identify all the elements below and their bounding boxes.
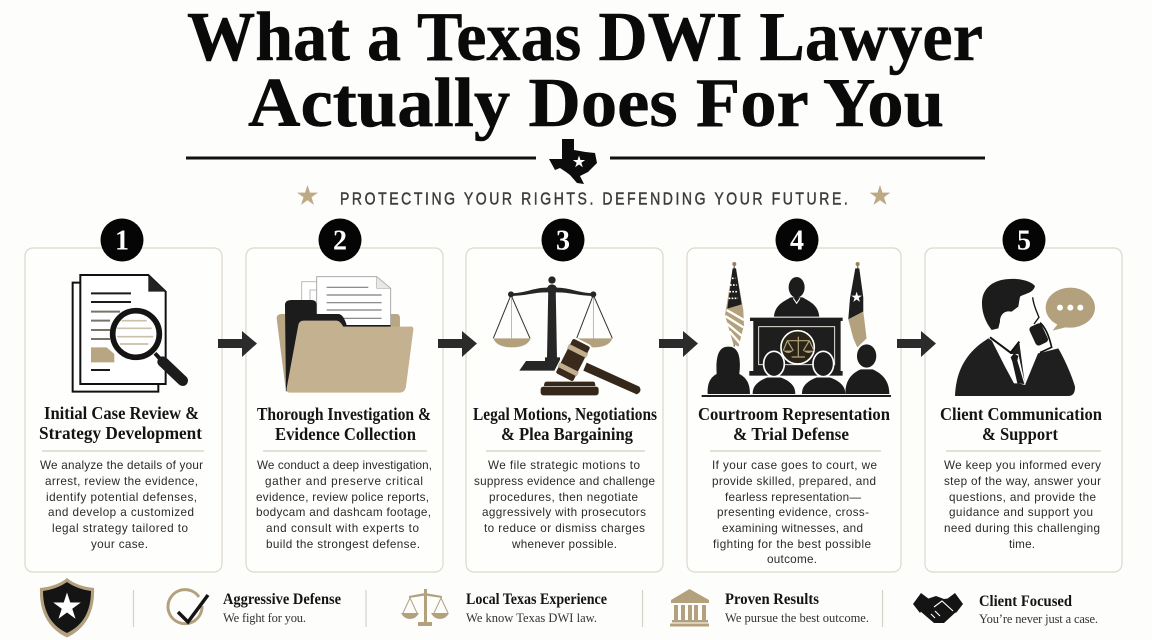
body text: fighting for the best possible — [713, 538, 871, 551]
body text: need during this challenging — [944, 522, 1100, 535]
body text — [712, 459, 877, 566]
heading: Courtroom Representation — [698, 404, 890, 424]
feature: aggressive defense — [168, 590, 341, 625]
feature text: Proven Results — [725, 591, 819, 608]
body text — [40, 459, 203, 551]
body text: fearless representation— — [725, 491, 861, 504]
panel: step 1 case review — [25, 218, 222, 572]
body text: procedures, then negotiate — [489, 491, 638, 504]
heading: Client Communication — [940, 404, 1102, 424]
feature text: Local Texas Experience — [466, 591, 607, 608]
arrow 2 to 3 — [438, 331, 477, 357]
icon: man on phone with speech bubble — [955, 279, 1095, 396]
feature text — [725, 591, 869, 625]
body text: and consult with experts to — [266, 522, 419, 535]
footer strip — [40, 578, 1098, 638]
body text: presenting evidence, cross- — [717, 506, 869, 519]
panel: step 2 investigation — [246, 218, 443, 572]
heading: & Plea Bargaining — [501, 424, 633, 444]
body text: We analyze the details of your — [40, 459, 203, 472]
step number 5 — [1002, 218, 1046, 262]
body text: provide skilled, prepared, and — [712, 475, 876, 488]
body text: examining witnesses, and — [722, 522, 863, 535]
heading: Initial Case Review & — [44, 403, 199, 423]
feature text — [979, 593, 1098, 626]
heading — [473, 404, 657, 444]
body text — [474, 459, 655, 551]
feature text: We fight for you. — [223, 611, 306, 625]
arrow 3 to 4 — [659, 331, 698, 357]
step number 3: 3 — [556, 226, 570, 256]
body text: guidance and support you — [949, 506, 1093, 519]
feature text: Client Focused — [979, 593, 1072, 610]
body text: outcome. — [767, 553, 817, 566]
icon: left star — [297, 185, 318, 205]
arrow 1 to 2 — [218, 331, 257, 357]
body text: If your case goes to court, we — [712, 459, 877, 472]
heading — [39, 403, 202, 443]
body text: and develop a customized — [48, 506, 194, 519]
step number 2 — [318, 218, 362, 262]
title — [187, 0, 983, 142]
body text: bodycam and dashcam footage, — [256, 506, 431, 519]
heading: Thorough Investigation & — [257, 404, 431, 424]
body text: whenever possible. — [511, 538, 617, 551]
icon: shield with star — [40, 578, 94, 638]
heading — [257, 404, 431, 444]
feature text: Aggressive Defense — [223, 591, 341, 608]
panel: step 3 motions — [466, 218, 663, 572]
feature: proven results — [670, 589, 869, 626]
icon: scales of justice and gavel — [493, 276, 641, 395]
body text: We file strategic motions to — [488, 459, 640, 472]
body text: time. — [1009, 538, 1035, 551]
icon: right star — [870, 185, 890, 205]
heading — [940, 404, 1102, 444]
step number 4 — [776, 218, 818, 262]
body text: suppress evidence and challenge — [474, 475, 655, 488]
step number 5: 5 — [1017, 226, 1031, 256]
body text — [256, 459, 432, 551]
step number 1 — [100, 218, 144, 262]
heading — [698, 404, 890, 444]
icon: handshake — [913, 593, 963, 623]
body text: step of the way, answer your — [944, 475, 1101, 488]
title: What a Texas DWI Lawyer — [187, 0, 983, 76]
icon: tan scales — [401, 589, 449, 626]
icon: folder with papers — [277, 277, 413, 393]
feature text: You’re never just a case. — [979, 612, 1098, 626]
feature text: We pursue the best outcome. — [725, 611, 869, 625]
icon: courthouse — [670, 589, 709, 626]
heading: Strategy Development — [39, 423, 202, 443]
feature text — [223, 591, 341, 625]
body text: your case. — [91, 538, 148, 551]
panel: step 4 courtroom — [687, 218, 901, 572]
step number 2: 2 — [333, 226, 347, 256]
body text: evidence, review police reports, — [256, 491, 429, 504]
tagline — [297, 185, 890, 209]
step number 4: 4 — [790, 226, 804, 256]
body text: We conduct a deep investigation, — [257, 459, 432, 472]
panel: step 5 client communication — [925, 218, 1122, 572]
feature: client focused — [913, 593, 1098, 626]
body text: to reduce or dismiss charges — [484, 522, 645, 535]
tagline text: PROTECTING YOUR RIGHTS. DEFENDING YOUR FUTURE. — [340, 189, 848, 209]
heading: Legal Motions, Negotiations — [473, 404, 657, 424]
feature text: We know Texas DWI law. — [466, 611, 597, 625]
body text: identify potential defenses, — [46, 491, 197, 504]
heading: Evidence Collection — [275, 424, 416, 444]
title: Actually Does For You — [248, 65, 944, 142]
feature text — [466, 591, 607, 625]
heading: & Support — [982, 424, 1058, 444]
step number 3 — [542, 218, 584, 262]
body text: arrest, review the evidence, — [45, 475, 198, 488]
body text — [944, 459, 1101, 551]
icon: document and magnifying glass — [73, 275, 183, 392]
body text: aggressively with prosecutors — [482, 506, 646, 519]
icon: check mark in circle — [168, 590, 208, 624]
feature: local Texas experience — [401, 589, 607, 626]
heading: & Trial Defense — [733, 424, 849, 444]
arrow 4 to 5 — [897, 331, 936, 357]
icon: courtroom with judge, flags and audience — [702, 262, 891, 397]
body text: We keep you informed every — [944, 459, 1101, 472]
body text: legal strategy tailored to — [52, 522, 188, 535]
body text: questions, and provide the — [949, 491, 1096, 504]
icon: Texas map with star — [549, 139, 597, 184]
body text: build the strongest defense. — [266, 538, 420, 551]
step number 1: 1 — [115, 226, 129, 256]
body text: gather and preserve critical — [265, 475, 423, 488]
